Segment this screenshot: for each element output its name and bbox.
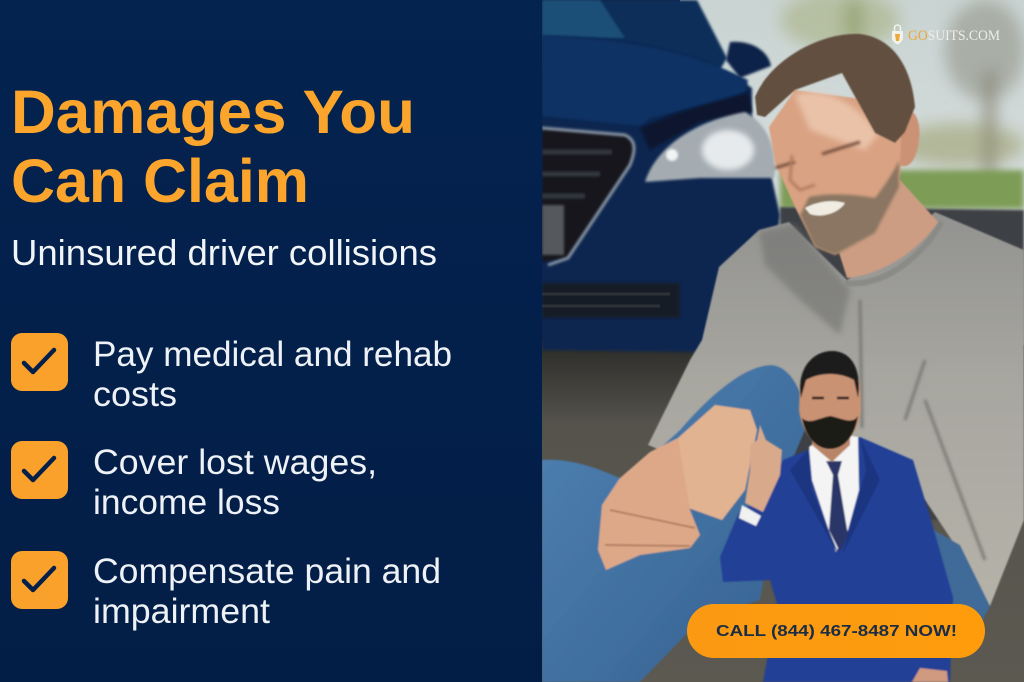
headlight — [645, 112, 775, 182]
damaged blue car — [542, 0, 780, 352]
shirt cuff — [739, 505, 761, 526]
icon: checkbox — [11, 441, 68, 499]
shirt — [648, 212, 1024, 606]
panel: damages list — [0, 0, 542, 682]
eyes — [812, 397, 849, 399]
neck — [812, 430, 850, 462]
beard — [802, 416, 858, 449]
list item: pain and impairment — [11, 551, 441, 631]
hair — [755, 34, 915, 143]
squinting eyes — [775, 142, 860, 168]
suit — [720, 437, 953, 682]
text: costs — [93, 375, 177, 414]
icon: checkbox — [11, 551, 68, 609]
text: Pay medical and rehab — [93, 335, 452, 374]
photo background: sky, trees, grass, road — [542, 0, 1024, 682]
side mirror — [726, 42, 771, 78]
face — [799, 368, 861, 450]
text: Compensate pain and — [93, 552, 441, 591]
text: impairment — [93, 592, 270, 631]
title: Damages You — [11, 78, 415, 146]
lapels — [790, 450, 840, 557]
title: Can Claim — [11, 147, 309, 215]
icon: checkbox — [11, 333, 68, 391]
jeans — [542, 365, 807, 682]
text: Cover lost wages, — [93, 443, 377, 482]
shirt collar — [845, 222, 942, 283]
call to action button — [687, 604, 985, 658]
lawyer in blue suit — [720, 351, 953, 682]
list item: medical costs — [11, 333, 452, 414]
subtitle: Uninsured driver collisions — [11, 232, 437, 273]
ear — [900, 110, 920, 166]
hands — [650, 405, 757, 520]
neck — [835, 180, 938, 278]
list item: lost wages — [11, 441, 377, 522]
nose — [790, 155, 815, 190]
panel: photo of injured driver by damaged car — [542, 0, 1024, 682]
call to action button: CALL (844) 467-8487 NOW! — [716, 623, 957, 640]
head — [769, 90, 905, 255]
title — [11, 78, 415, 215]
icon: logo shield lock — [892, 25, 903, 44]
text: income loss — [93, 483, 280, 522]
tie — [826, 461, 848, 552]
grille — [542, 128, 634, 262]
logo: GoSuits.com: GOSUITS.COM — [908, 28, 1000, 44]
injured man in grey shirt — [542, 34, 1024, 682]
hood crease shadow — [640, 92, 752, 150]
beard — [800, 160, 899, 255]
logo: GoSuits.com — [892, 25, 1000, 44]
wrist and watch — [912, 668, 948, 682]
shirt collar — [809, 432, 859, 552]
hair — [800, 351, 859, 398]
teeth — [805, 201, 845, 216]
raised hand — [745, 425, 782, 512]
